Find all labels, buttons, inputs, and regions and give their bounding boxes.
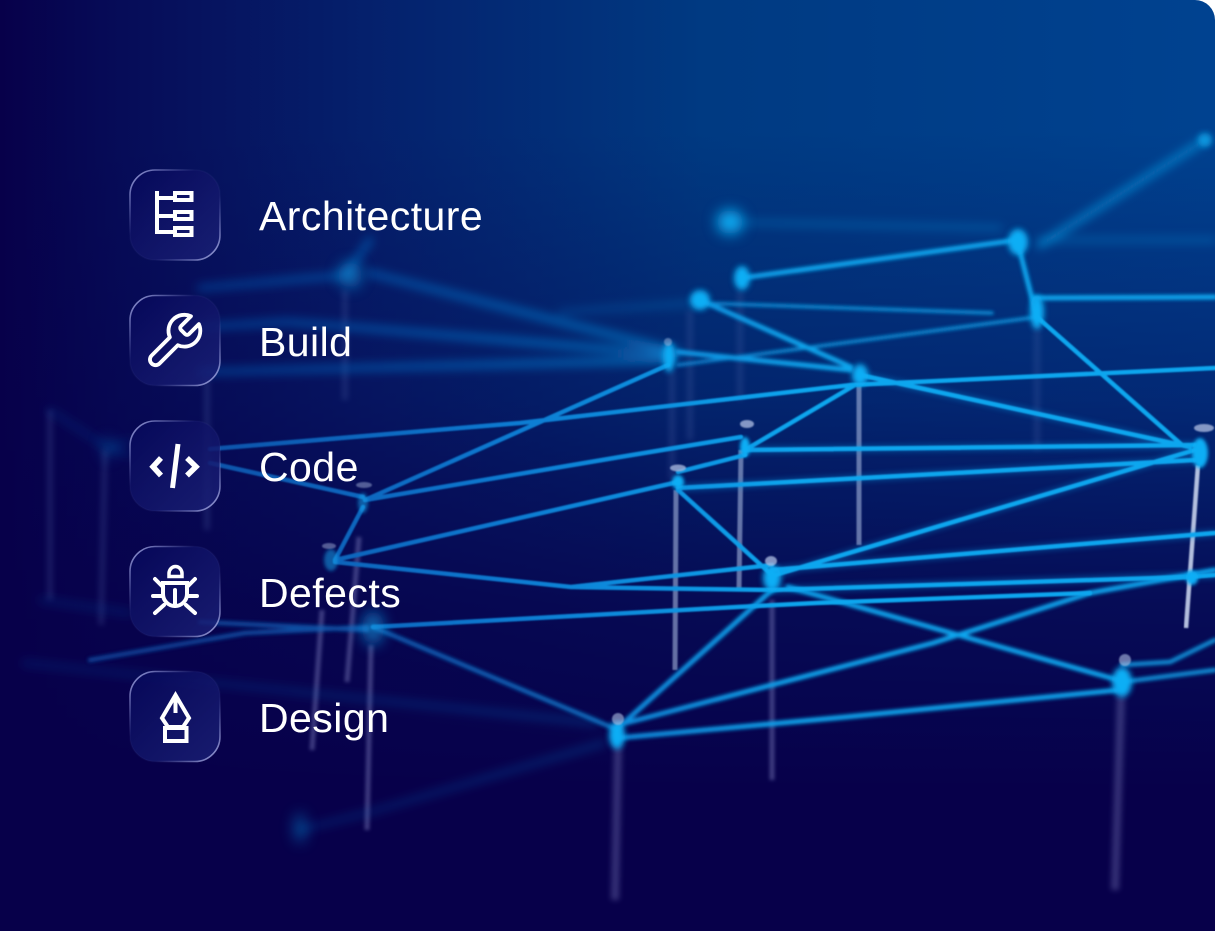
icon: bug <box>153 566 197 613</box>
icon: pen nib <box>162 695 189 741</box>
label: Code: Code <box>259 444 359 490</box>
label: Defects: Defects <box>259 570 401 616</box>
pins <box>50 290 1198 900</box>
icon tile: build <box>130 296 220 386</box>
icon tile: code <box>130 421 220 511</box>
threads: glow <box>678 375 1215 590</box>
pin heads <box>322 338 1214 725</box>
icon: hierarchy tree <box>157 191 192 235</box>
item: Code <box>130 421 359 511</box>
icon tile: defects <box>130 546 220 636</box>
item: Architecture <box>130 170 483 260</box>
icon tile: design <box>130 672 220 762</box>
label: Design: Design <box>259 695 389 741</box>
threads: far, heavily blurred <box>24 140 1215 830</box>
icon tile: architecture <box>130 170 220 260</box>
item: Build <box>130 296 352 386</box>
threads: mid focus <box>90 240 1215 738</box>
thread knots <box>100 133 1212 843</box>
item: Defects <box>130 546 401 636</box>
label: Architecture: Architecture <box>259 193 483 239</box>
label: Build: Build <box>259 319 352 365</box>
icon: code brackets <box>153 444 196 488</box>
icon: wrench <box>150 315 200 365</box>
threads: in focus <box>210 317 1215 627</box>
item: Design <box>130 672 389 762</box>
